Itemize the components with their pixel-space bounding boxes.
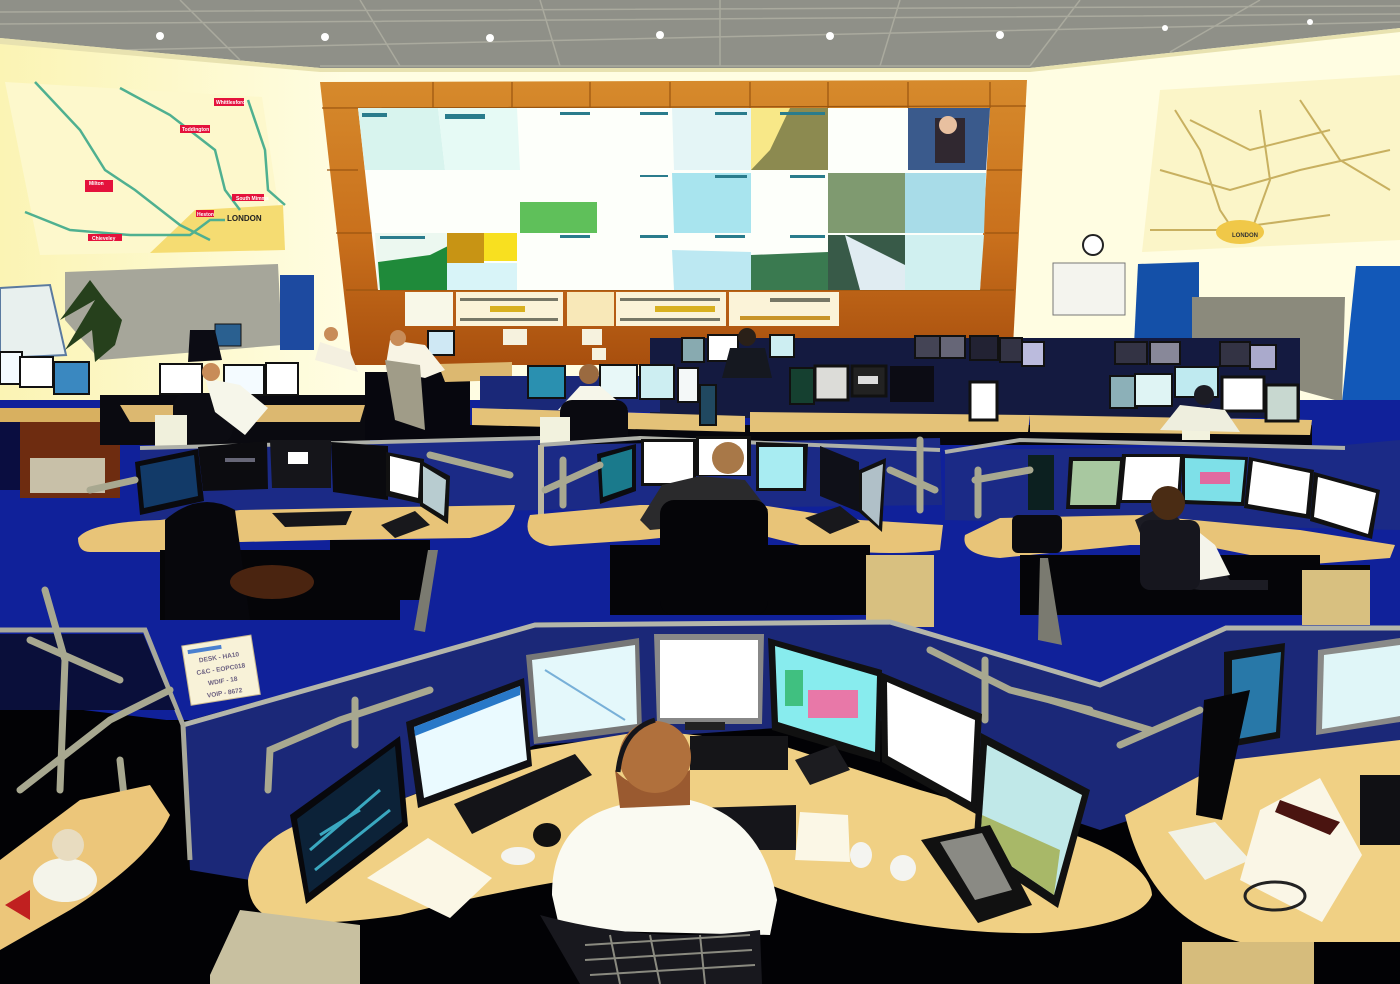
desk placard	[182, 635, 260, 705]
blue door	[1134, 262, 1199, 345]
drawer units	[414, 550, 1370, 645]
left wall map: South Mimms	[236, 196, 269, 202]
video wall wood surround	[320, 80, 1027, 365]
plant	[60, 280, 122, 362]
middle row monitors centre	[597, 436, 886, 534]
left wall map	[5, 82, 285, 255]
brown stool	[230, 565, 314, 599]
main lower desk surface	[248, 730, 1152, 933]
middle row dark understructure	[160, 540, 1370, 620]
middle row monitors left	[135, 440, 450, 538]
left wall map: Whittlesford	[216, 100, 245, 106]
middle row desks	[78, 505, 1395, 565]
lower monitors	[290, 634, 1400, 908]
middle row partitions	[140, 438, 1400, 530]
lower left pedestal	[210, 910, 360, 984]
desk placard: VOIP - 8672	[207, 687, 243, 700]
wall clock	[1083, 235, 1103, 255]
upper desk row centre and right	[470, 328, 1312, 450]
left side shelving desk	[0, 408, 130, 498]
monitor support arms	[20, 440, 1200, 850]
left whiteboard	[0, 285, 66, 358]
desk placard: DESK - HA10	[199, 651, 240, 664]
seated worker at right desk	[1135, 486, 1268, 590]
right wall map	[1142, 75, 1400, 252]
right wall map: LONDON	[1232, 233, 1258, 239]
wall schematic posters	[405, 292, 839, 360]
seated worker at left desk	[165, 502, 250, 620]
left wall map: Heston	[197, 212, 214, 218]
right blue door	[1342, 266, 1400, 402]
left storage cabinets	[65, 264, 282, 360]
desk placard: WDIF - 18	[208, 676, 238, 687]
left wall map: Milton	[89, 181, 104, 187]
left wall map: Toddington	[182, 127, 209, 133]
lower row partitions	[0, 622, 1400, 880]
floor	[0, 400, 1400, 720]
desk placard: C&C - EOPC018	[196, 662, 246, 677]
keyboards and desk items	[5, 736, 1400, 923]
upper desk row left	[0, 324, 512, 448]
lower row dark base	[0, 622, 1400, 984]
filing cabinets	[1192, 297, 1345, 402]
back wall	[0, 0, 1400, 560]
whiteboard	[1053, 263, 1125, 315]
left wall map: Chieveley	[92, 236, 116, 242]
ceiling	[0, 0, 1400, 72]
map label: London: LONDON	[227, 214, 262, 223]
middle row monitors right	[1012, 454, 1380, 553]
drawer unit bottom	[1182, 942, 1314, 984]
main seated operator	[540, 720, 777, 984]
right lower desk surface	[1125, 740, 1400, 942]
left lower desk surface	[0, 785, 170, 950]
video wall screens	[358, 108, 990, 290]
seated worker at centre desk	[640, 442, 768, 615]
